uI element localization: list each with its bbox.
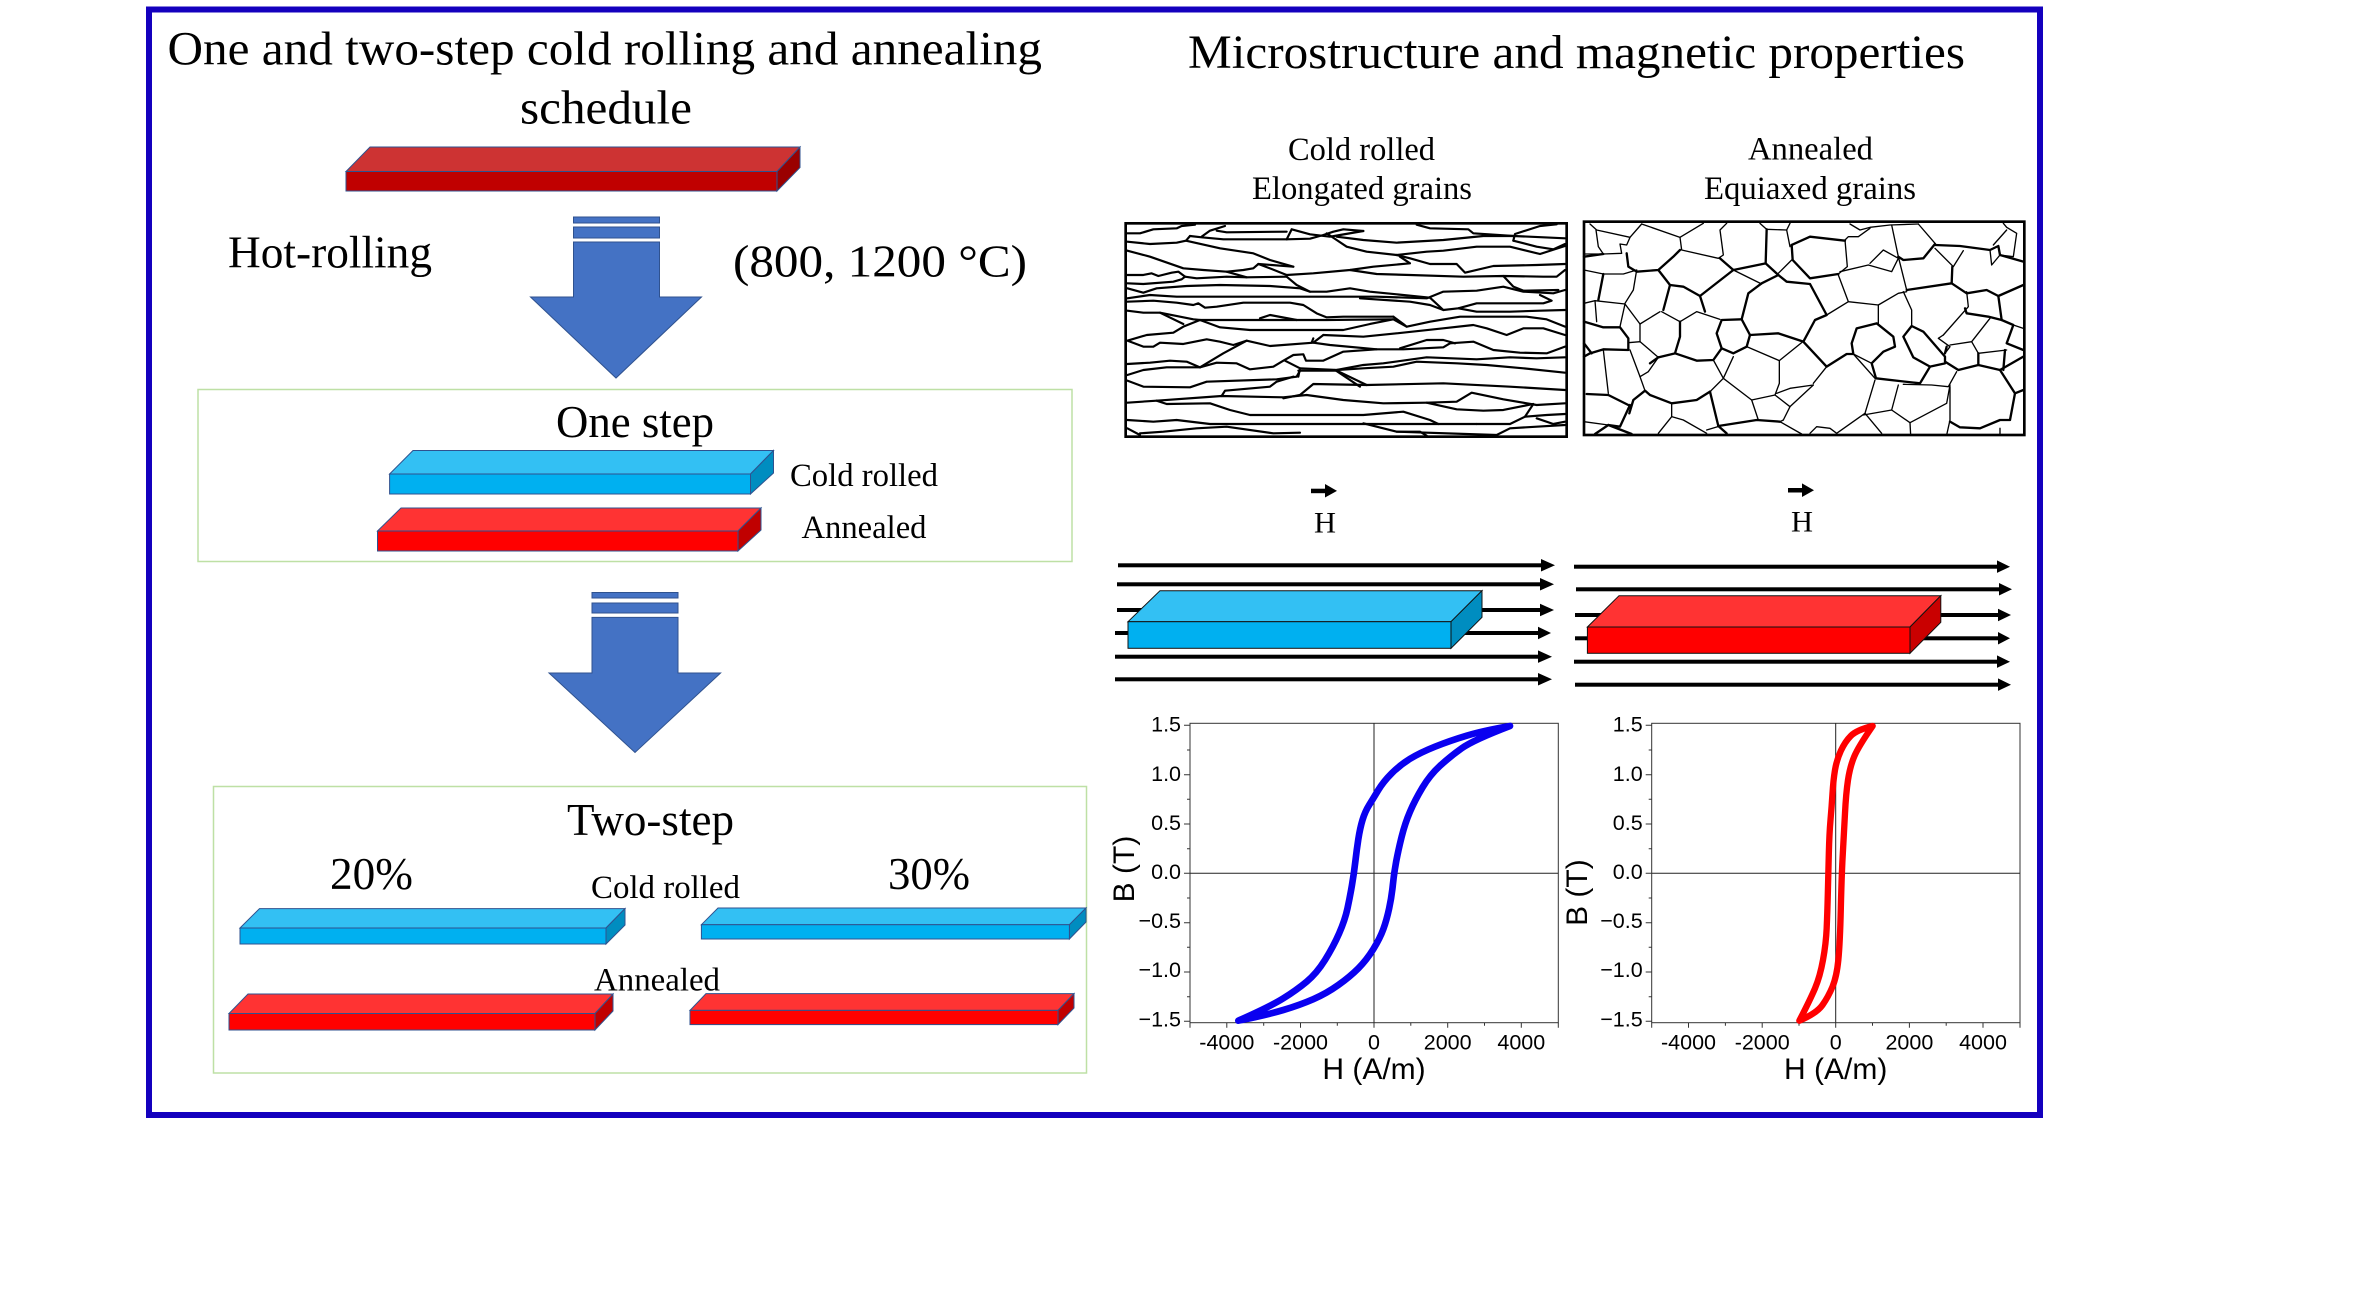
arrow: hot rolling to one step [530, 217, 702, 378]
y tick labels: 0.5 [1613, 811, 1643, 835]
hot rolled slab [346, 147, 800, 191]
title: left: One and two-step cold rolling and annealing [168, 22, 1042, 76]
curve: blue B-H loop [1238, 726, 1510, 1021]
label: 20%: 20% [330, 849, 413, 899]
red slab 30% [690, 994, 1074, 1025]
x tick labels: 0 [1368, 1030, 1380, 1054]
field lines: annealed [1574, 560, 2012, 691]
y tick labels: −1.0 [1600, 958, 1643, 982]
label: H left: H [1314, 506, 1336, 540]
x axis title: H (A/m) [1322, 1053, 1426, 1086]
x tick labels [1661, 1030, 2007, 1054]
label: cold rolled elongated grains: Elongated grains [1252, 171, 1472, 207]
x axis title: H (A/m) [1784, 1053, 1887, 1086]
x tick labels: 2000 [1885, 1030, 1933, 1054]
panel: one step [198, 390, 1072, 562]
x tick labels: 0 [1830, 1030, 1842, 1054]
y tick labels: 1.5 [1151, 713, 1181, 737]
x tick labels: 4000 [1497, 1030, 1545, 1054]
micrograph: elongated grains [1126, 223, 1567, 437]
x tick labels [1199, 1030, 1545, 1054]
x tick labels: 2000 [1424, 1030, 1472, 1054]
curve: red B-H loop [1799, 726, 1873, 1021]
blue slab 20% [240, 909, 625, 944]
label: 30%: 30% [888, 849, 970, 899]
x tick labels: -4000 [1199, 1030, 1254, 1054]
y tick labels: 1.0 [1613, 762, 1643, 786]
red annealed slab [378, 508, 761, 551]
y tick labels: −0.5 [1600, 909, 1643, 933]
red slab 20% [229, 994, 613, 1030]
label: hot-rolling: Hot-rolling [228, 228, 432, 278]
x tick labels: -2000 [1273, 1030, 1328, 1054]
chart: annealed hysteresis loop [1561, 713, 2020, 1086]
y tick labels: 0.5 [1151, 811, 1181, 835]
y axis title: B (T) [1561, 859, 1594, 926]
label: temperatures: (800, 1200 °C) [733, 236, 1027, 286]
block: annealed in field [1587, 596, 1941, 653]
title: left: schedule [520, 82, 692, 134]
title: left [168, 22, 1042, 134]
icon: field direction arrow right [1788, 483, 1814, 497]
y tick labels [1139, 713, 1181, 1032]
label: annealed equiaxed grains: Equiaxed grains [1704, 171, 1916, 207]
x tick labels: -2000 [1735, 1030, 1790, 1054]
y axis title: B (T) [1108, 836, 1141, 902]
label: cold rolled: Cold rolled [790, 458, 938, 494]
icon: field direction arrow left [1311, 484, 1337, 498]
label: cold rolled elongated grains [1252, 132, 1472, 207]
label: annealed equiaxed grains [1704, 131, 1916, 207]
arrow: one step to two step [549, 592, 721, 752]
y tick labels: −1.5 [1139, 1008, 1181, 1032]
micrograph: equiaxed grains [1584, 222, 2024, 435]
blue cold rolled slab [390, 450, 774, 494]
x tick labels: -4000 [1661, 1030, 1716, 1054]
y tick labels: 1.5 [1613, 713, 1643, 737]
blue slab 30% [701, 908, 1086, 939]
y tick labels: −1.5 [1600, 1008, 1643, 1032]
label: cold rolled: Cold rolled [591, 870, 740, 906]
outer frame [149, 10, 2040, 1115]
heading: one step: One step [556, 397, 714, 447]
y tick labels: −0.5 [1139, 909, 1181, 933]
chart: cold rolled hysteresis loop [1108, 713, 1558, 1086]
label: annealed equiaxed grains: Annealed [1748, 131, 1873, 167]
label: annealed: Annealed [802, 510, 926, 546]
y tick labels: −1.0 [1139, 958, 1181, 982]
y tick labels: 0.0 [1613, 860, 1643, 884]
field lines: cold rolled [1115, 559, 1555, 686]
heading: two-step: Two-step [567, 795, 734, 845]
label: cold rolled elongated grains: Cold rolled [1288, 132, 1435, 168]
y tick labels: 0.0 [1151, 860, 1181, 884]
label: H right: H [1791, 506, 1813, 538]
y tick labels [1600, 713, 1643, 1032]
label: annealed: Annealed [594, 962, 720, 998]
block: cold rolled in field [1128, 591, 1482, 648]
title: right: Microstructure and magnetic properties [1188, 26, 1965, 79]
y tick labels: 1.0 [1151, 762, 1181, 786]
x tick labels: 4000 [1959, 1030, 2007, 1054]
panel: two step [214, 786, 1086, 1073]
